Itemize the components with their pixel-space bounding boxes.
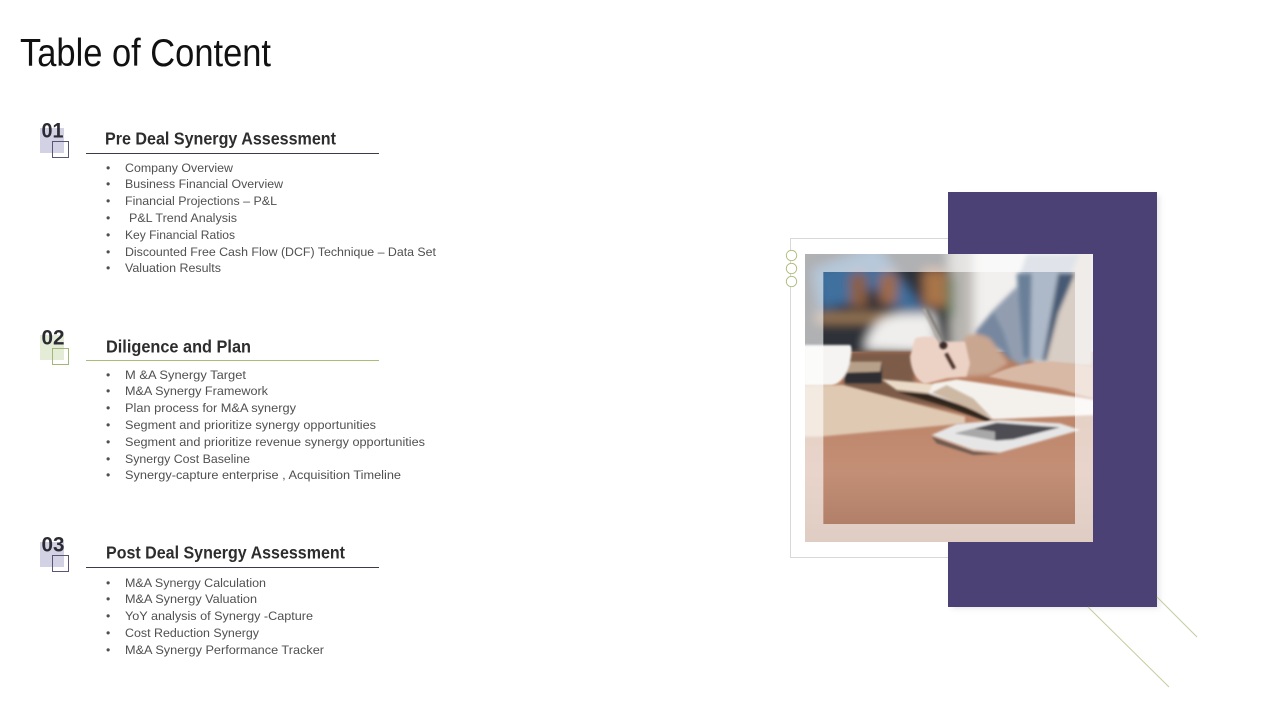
heading 03: Post Deal Synergy Assessment	[106, 542, 345, 562]
section 01: Pre Deal Synergy Assessment	[40, 118, 437, 275]
list 02: •	[106, 452, 110, 466]
list 01: •	[106, 161, 110, 175]
list 01: •	[106, 228, 110, 242]
title: Table of Content	[20, 32, 271, 75]
list 01: •	[106, 177, 110, 191]
list 01: •	[106, 245, 110, 259]
coffee cup	[803, 345, 882, 386]
list 03: M&A Synergy Performance Tracker	[125, 643, 324, 657]
list 03: •	[106, 643, 110, 657]
gray outline frame	[790, 238, 1090, 558]
list 01: Financial Projections – P&L	[125, 194, 277, 208]
list 02	[106, 368, 425, 482]
list 01: Company Overview	[125, 161, 233, 175]
list 02: Synergy-capture enterprise , Acquisition Timeline	[125, 468, 401, 482]
list 03: Cost Reduction Synergy	[125, 626, 260, 640]
list 03: •	[106, 609, 110, 623]
list 01: •	[106, 211, 110, 225]
list 02: Segment and prioritize revenue synergy opportunities	[125, 435, 425, 449]
section 03: Post Deal Synergy Assessment	[40, 532, 379, 657]
notepad	[803, 385, 965, 437]
list 03: M&A Synergy Calculation	[125, 576, 266, 590]
list 02: •	[106, 384, 110, 398]
list 01: •	[106, 261, 110, 275]
list 03: M&A Synergy Valuation	[125, 592, 257, 606]
purple panel	[948, 192, 1157, 607]
green diagonal lines	[1088, 597, 1197, 687]
list 01: •	[106, 194, 110, 208]
list 02: M&A Synergy Framework	[125, 384, 269, 398]
shirt and scarf	[963, 250, 1093, 377]
number badge 03: 03	[42, 532, 65, 556]
list 02: •	[106, 368, 110, 382]
number badge 01	[40, 118, 68, 158]
list 02: •	[106, 418, 110, 432]
list 01: P&L Trend Analysis	[129, 211, 237, 225]
purple panel shadow	[952, 196, 1159, 608]
heading 01: Pre Deal Synergy Assessment	[105, 128, 336, 148]
list 02: •	[106, 468, 110, 482]
list 02: Plan process for M&A synergy	[125, 401, 297, 415]
number badge 01: 01	[42, 118, 64, 142]
list 01: Discounted Free Cash Flow (DCF) Technique – Data Set	[125, 245, 437, 259]
number badge 02	[40, 326, 68, 364]
photo: person writing in a notebook at a table	[805, 254, 1093, 542]
blurred cafe background	[805, 254, 1031, 352]
section 02: Diligence and Plan	[40, 326, 425, 482]
heading 02: Diligence and Plan	[106, 336, 251, 356]
writing hand	[910, 336, 970, 384]
list 03: YoY analysis of Synergy -Capture	[125, 609, 313, 623]
list 03: •	[106, 592, 110, 606]
list 02: Segment and prioritize synergy opportunities	[125, 418, 376, 432]
list 01	[106, 161, 437, 275]
list 03	[106, 576, 324, 657]
table	[805, 352, 1093, 542]
list 02: Synergy Cost Baseline	[125, 452, 250, 466]
list 02: •	[106, 435, 110, 449]
right hand	[988, 362, 1093, 398]
translucent white photo frame	[805, 254, 1093, 542]
green circles	[786, 250, 797, 287]
number badge 02: 02	[42, 326, 65, 350]
list 02: •	[106, 401, 110, 415]
number badge 03	[40, 532, 68, 572]
list 01: Business Financial Overview	[125, 177, 283, 191]
list 03: •	[106, 576, 110, 590]
pen	[924, 308, 954, 369]
open notebook	[882, 379, 1095, 422]
list 01: Key Financial Ratios	[125, 228, 235, 242]
list 01: Valuation Results	[125, 261, 221, 275]
smartphone	[932, 420, 1080, 455]
list 02: M &A Synergy Target	[125, 368, 247, 382]
list 03: •	[106, 626, 110, 640]
